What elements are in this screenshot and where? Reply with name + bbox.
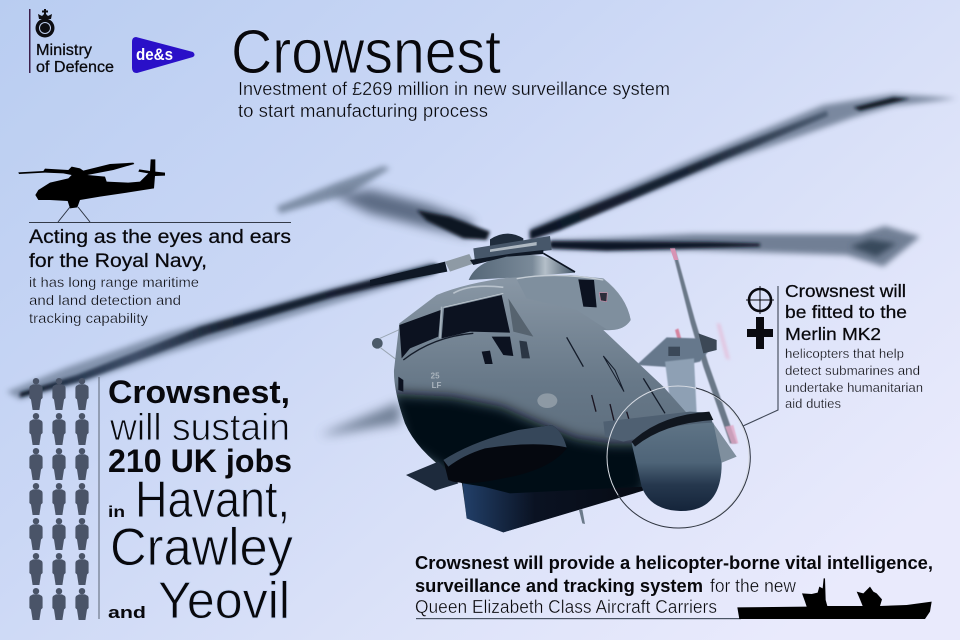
rotor blade: right	[550, 226, 920, 267]
divider: royal navy	[29, 222, 291, 223]
logo: de&s	[132, 37, 194, 73]
text block: Merlin MK2: undertake humanitarian	[785, 380, 923, 395]
icon: plus	[747, 317, 773, 349]
main body	[394, 275, 690, 532]
rotor blade: upper right	[530, 94, 957, 240]
stub wing	[406, 462, 458, 491]
text block: eyes and ears: and land detection and	[29, 292, 181, 308]
text block: jobs: in	[108, 504, 125, 521]
text block: eyes and ears	[29, 226, 291, 326]
icon: helicopter silhouette	[18, 159, 165, 222]
text block: Merlin MK2: Crowsnest will	[785, 281, 906, 301]
crest icon	[36, 9, 54, 38]
nose probe	[372, 329, 400, 359]
rear belly	[463, 483, 643, 532]
logo: Ministry of Defence	[29, 9, 114, 76]
tail boom	[637, 333, 737, 463]
text block: jobs: will sustain	[109, 407, 290, 449]
rotor blade: left	[7, 262, 437, 435]
lower sponson	[443, 425, 567, 483]
text block: jobs: 210 UK jobs	[108, 443, 292, 479]
text block: Merlin MK2: detect submarines and	[785, 363, 920, 378]
icon: aircraft carrier silhouette	[737, 578, 932, 619]
rotor blade: upper left	[277, 166, 490, 240]
text block: jobs: Crawley	[110, 518, 293, 577]
fuselage details	[403, 275, 665, 421]
fuselage and sensor pod (coordinates in 3x crop units): LF	[432, 381, 442, 390]
text block: carriers: surveillance and tracking system	[415, 576, 703, 596]
antenna	[579, 509, 585, 524]
text block: eyes and ears: tracking capability	[29, 310, 148, 326]
tail rotor	[670, 248, 738, 444]
text block: carriers: Crowsnest will provide a helicopter-borne vital intelligence,	[415, 553, 933, 573]
logo: Ministry of Defence: Ministry	[36, 42, 92, 59]
title: Crowsnest	[231, 18, 501, 87]
icon array: people	[29, 378, 89, 620]
crowsnest sensor pod	[603, 412, 722, 511]
text block: Merlin MK2: Merlin MK2	[785, 324, 881, 344]
text block: jobs: Havant,	[135, 471, 290, 529]
callout ring and leader	[607, 286, 778, 528]
text block: jobs: Yeovil	[158, 572, 290, 630]
subtitle	[238, 79, 670, 121]
text block: jobs: and	[108, 604, 146, 622]
text block: eyes and ears: Acting as the eyes and ears	[29, 226, 291, 248]
text block: carriers	[415, 553, 933, 617]
text block: Merlin MK2: be fitted to the	[785, 302, 907, 322]
text block: jobs: Crowsnest,	[108, 374, 290, 410]
subtitle: Investment of £269 million in new surveillance system	[238, 79, 670, 99]
icon: crosshair	[746, 286, 774, 314]
side markings: 25	[431, 372, 440, 381]
divider: carriers	[416, 618, 741, 619]
logo: Ministry of Defence: of Defence	[36, 59, 114, 76]
shadow under nose	[390, 393, 647, 533]
fuselage and sensor pod (coordinates in 3x crop units)	[370, 234, 737, 533]
cockpit windows	[398, 279, 607, 392]
text block: jobs	[108, 374, 293, 630]
upper fairing	[469, 255, 575, 280]
text block: Merlin MK2	[785, 281, 923, 411]
text block: Merlin MK2: aid duties	[785, 396, 841, 411]
divider: jobs	[98, 377, 100, 619]
photo: helicopter	[7, 94, 957, 533]
text block: carriers: Queen Elizabeth Class Aircraft Carriers	[415, 597, 717, 617]
text block: Merlin MK2: helicopters that help	[785, 346, 904, 361]
text block: carriers: for the new	[710, 576, 797, 596]
rotor hub	[370, 234, 552, 286]
logo: de&s: de&s	[136, 46, 173, 64]
text block: eyes and ears: for the Royal Navy,	[29, 250, 207, 272]
fuselage bump	[537, 393, 557, 408]
text block: eyes and ears: it has long range maritime	[29, 274, 199, 290]
subtitle: to start manufacturing process	[238, 101, 488, 121]
